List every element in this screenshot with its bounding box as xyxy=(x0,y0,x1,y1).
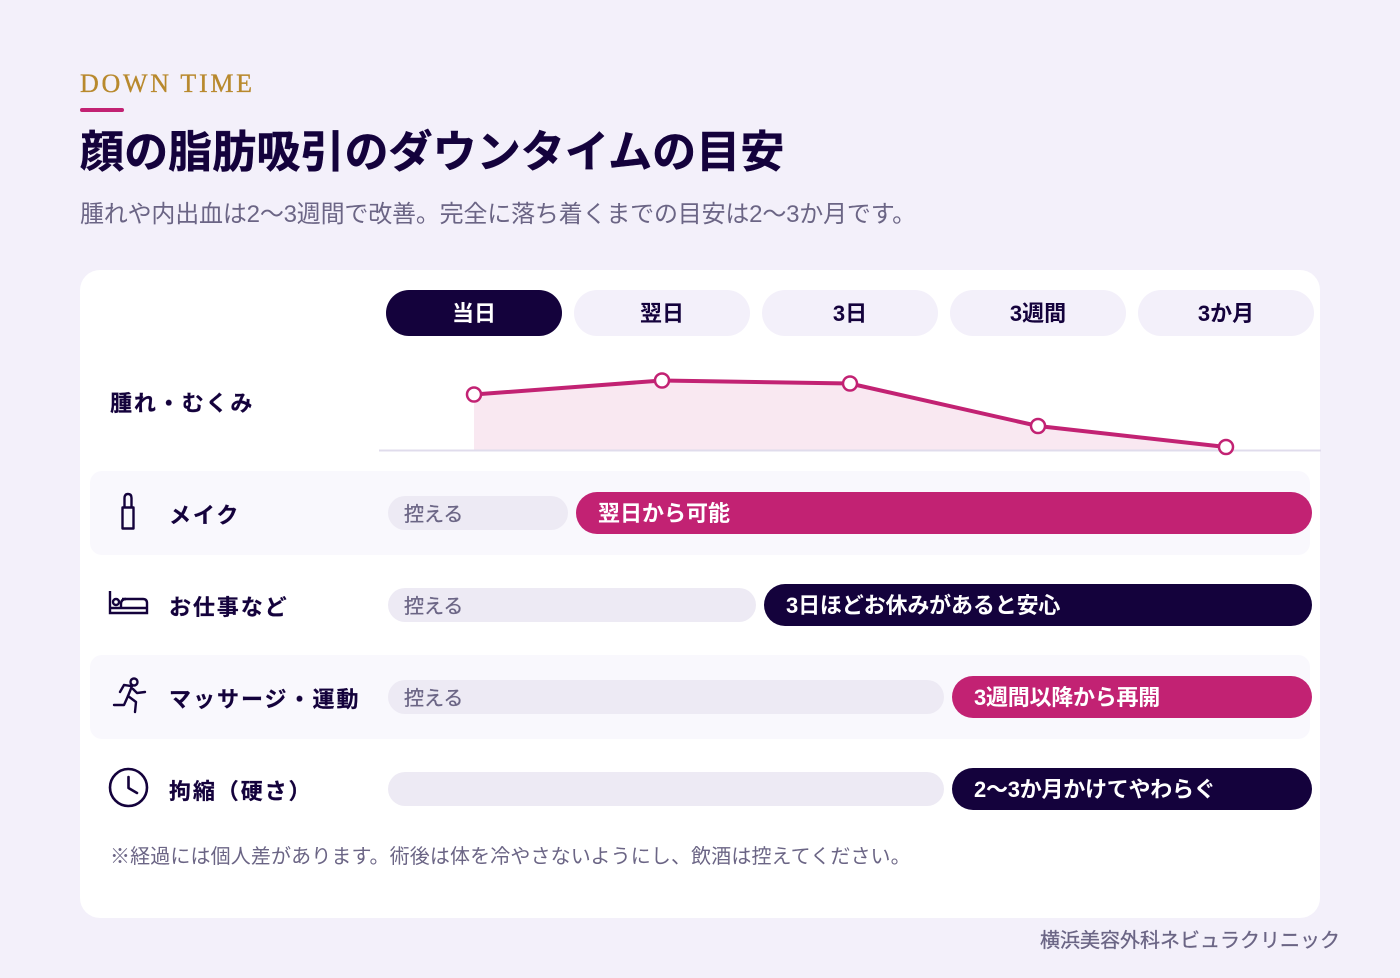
row label: お仕事など: お仕事など xyxy=(169,595,289,620)
bar: 2〜3か月かけてやわらぐ xyxy=(952,768,1312,810)
column header: 3か月: 3か月 xyxy=(1198,301,1254,326)
bar: 2〜3か月かけてやわらぐ: 2〜3か月かけてやわらぐ xyxy=(974,777,1215,802)
bar: 翌日から可能: 翌日から可能 xyxy=(598,501,730,526)
icon: clock xyxy=(108,768,148,808)
row label: 拘縮（硬さ）: 拘縮（硬さ） xyxy=(169,779,312,804)
row label: メイク: メイク xyxy=(169,503,240,528)
subtitle: 腫れや内出血は2〜3週間で改善。完全に落ち着くまでの目安は2〜3か月です。 xyxy=(80,201,916,228)
row label: 腫れ・むくみ: 腫れ・むくみ xyxy=(110,391,254,416)
bar: 控える xyxy=(388,496,568,530)
icon: runner xyxy=(112,677,146,714)
column header: 3日: 3日 xyxy=(833,301,867,326)
row label: マッサージ・運動: マッサージ・運動 xyxy=(169,687,361,712)
bar: 控える xyxy=(388,680,944,714)
row background: メイク xyxy=(90,471,1310,555)
bar: 3日ほどお休みがあると安心 xyxy=(764,584,1312,626)
bar: 控える: 控える xyxy=(404,596,463,618)
footnote: ※経過には個人差があります。術後は体を冷やさないようにし、飲酒は控えてください。 xyxy=(110,846,911,868)
column header: 当日 xyxy=(386,290,562,336)
bar: 控える xyxy=(388,588,756,622)
eyebrow: DOWN TIME: DOWN TIME xyxy=(80,69,255,98)
bar: 翌日から可能 xyxy=(576,492,1312,534)
bar: 控える: 控える xyxy=(404,688,463,710)
bar: 3週間以降から再開: 3週間以降から再開 xyxy=(974,685,1160,710)
column header: 3日 xyxy=(762,290,938,336)
column header: 3週間: 3週間 xyxy=(1010,301,1066,326)
column header: 当日: 当日 xyxy=(452,301,496,326)
column header: 3か月 xyxy=(1138,290,1314,336)
panel: timeline card xyxy=(80,270,1320,918)
column header: 翌日 xyxy=(574,290,750,336)
icon: bed xyxy=(108,591,148,614)
bar: 控える: 控える xyxy=(404,504,463,526)
bar: empty restriction xyxy=(388,772,944,806)
line chart: swelling xyxy=(379,372,1321,456)
row background: マッサージ・運動 xyxy=(90,655,1310,739)
column header: 翌日: 翌日 xyxy=(640,301,684,326)
accent rule xyxy=(80,108,124,112)
bar: 3日ほどお休みがあると安心: 3日ほどお休みがあると安心 xyxy=(786,593,1060,618)
credit: 横浜美容外科ネビュラクリニック xyxy=(1040,930,1340,952)
bar: 3週間以降から再開 xyxy=(952,676,1312,718)
column header: 3週間 xyxy=(950,290,1126,336)
icon: lipstick xyxy=(121,492,135,530)
title: 顔の脂肪吸引のダウンタイムの目安 xyxy=(80,128,784,177)
